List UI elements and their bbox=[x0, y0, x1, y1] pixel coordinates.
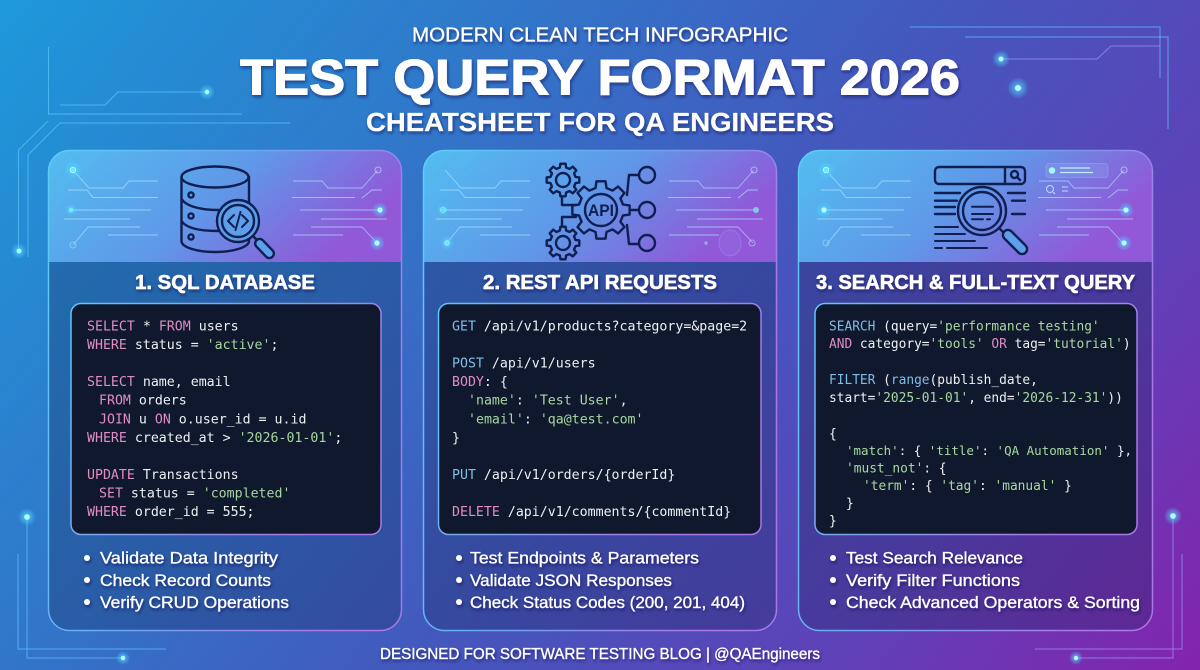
code block: WHERE status = 'active'; bbox=[87, 338, 278, 353]
checklist: Check Status Codes (200, 201, 404) bbox=[470, 594, 745, 612]
heading: 1. SQL DATABASE bbox=[135, 272, 315, 294]
code block: DELETE /api/v1/comments/{commentId} bbox=[452, 505, 731, 520]
checklist bbox=[456, 550, 745, 612]
code block: JOIN u ON o.user_id = u.id bbox=[99, 412, 306, 427]
heading: 2. REST API REQUESTS bbox=[483, 272, 717, 294]
footer credit: DESIGNED FOR SOFTWARE TESTING BLOG | @QAEngineers bbox=[380, 646, 820, 663]
code block: AND category='tools' OR tag='tutorial') bbox=[829, 337, 1131, 352]
panel header band bbox=[48, 150, 402, 262]
code block: WHERE order_id = 555; bbox=[87, 505, 255, 520]
heading: 3. SEARCH & FULL-TEXT QUERY bbox=[816, 272, 1136, 294]
header circuit decoration bbox=[64, 161, 388, 251]
circuit lines: top right bbox=[910, 27, 1168, 129]
panel: REST API bbox=[424, 150, 776, 630]
code block: { bbox=[829, 427, 837, 442]
code block bbox=[71, 304, 381, 534]
code block: 'must_not': { bbox=[846, 462, 947, 476]
panel: search and full-text query bbox=[798, 150, 1152, 630]
header circuit decoration bbox=[436, 167, 763, 256]
code block: SELECT name, email bbox=[87, 375, 231, 390]
icon label: API: API bbox=[588, 202, 614, 220]
code block: FILTER (range(publish_date, bbox=[829, 373, 1038, 388]
code block: } bbox=[846, 496, 854, 512]
panel header band bbox=[798, 150, 1152, 262]
code block bbox=[438, 304, 761, 534]
code block: 'name': 'Test User', bbox=[468, 394, 628, 409]
decorative search result card bbox=[1046, 164, 1108, 194]
circuit lines: bottom right bbox=[1035, 507, 1182, 665]
code block: 'email': 'qa@test.com' bbox=[468, 412, 644, 427]
code block: FROM orders bbox=[99, 394, 187, 409]
code block: PUT /api/v1/orders/{orderId} bbox=[452, 468, 675, 483]
code block: SELECT * FROM users bbox=[87, 320, 239, 334]
checklist: Test Search Relevance bbox=[846, 550, 1023, 568]
checklist: Verify CRUD Operations bbox=[100, 594, 289, 612]
checklist: Validate JSON Responses bbox=[470, 572, 672, 590]
code block: 'term': { 'tag': 'manual' } bbox=[863, 479, 1072, 494]
subtitle: CHEATSHEET FOR QA ENGINEERS bbox=[366, 109, 834, 137]
circuit lines: top left bbox=[11, 47, 290, 259]
checklist: Test Endpoints & Parameters bbox=[470, 550, 699, 568]
title: TEST QUERY FORMAT 2026 bbox=[240, 50, 960, 106]
code block: 'match': { 'title': 'QA Automation' }, bbox=[846, 443, 1132, 458]
code block: GET /api/v1/products?category=&page=2 bbox=[452, 320, 747, 334]
icon: search bar and magnifier bbox=[935, 167, 1029, 256]
code block bbox=[815, 304, 1137, 534]
code block: BODY: { bbox=[452, 375, 508, 390]
checklist: Check Record Counts bbox=[100, 572, 271, 590]
kicker: MODERN CLEAN TECH INFOGRAPHIC bbox=[412, 24, 788, 46]
code block: POST /api/v1/users bbox=[452, 357, 596, 372]
icon: API gears bbox=[547, 164, 655, 259]
checklist: Verify Filter Functions bbox=[846, 572, 1020, 590]
code block: SET status = 'completed' bbox=[99, 486, 290, 502]
checklist: Check Advanced Operators & Sorting bbox=[846, 594, 1140, 612]
code block: start='2025-01-01', end='2026-12-31')) bbox=[829, 391, 1123, 406]
code block: } bbox=[829, 514, 837, 529]
code block: WHERE created_at > '2026-01-01'; bbox=[87, 431, 342, 446]
panel: SQL database bbox=[48, 150, 402, 630]
code block: UPDATE Transactions bbox=[87, 468, 239, 483]
checklist bbox=[830, 550, 1140, 612]
panel header band bbox=[424, 150, 776, 262]
header circuit decoration bbox=[816, 161, 1134, 251]
circuit lines: bottom left bbox=[18, 508, 166, 665]
icon: database with magnifier bbox=[182, 166, 276, 260]
code block: SEARCH (query='performance testing' bbox=[829, 320, 1100, 334]
code block: } bbox=[452, 431, 460, 446]
checklist: Validate Data Integrity bbox=[100, 550, 279, 568]
checklist bbox=[84, 550, 289, 612]
